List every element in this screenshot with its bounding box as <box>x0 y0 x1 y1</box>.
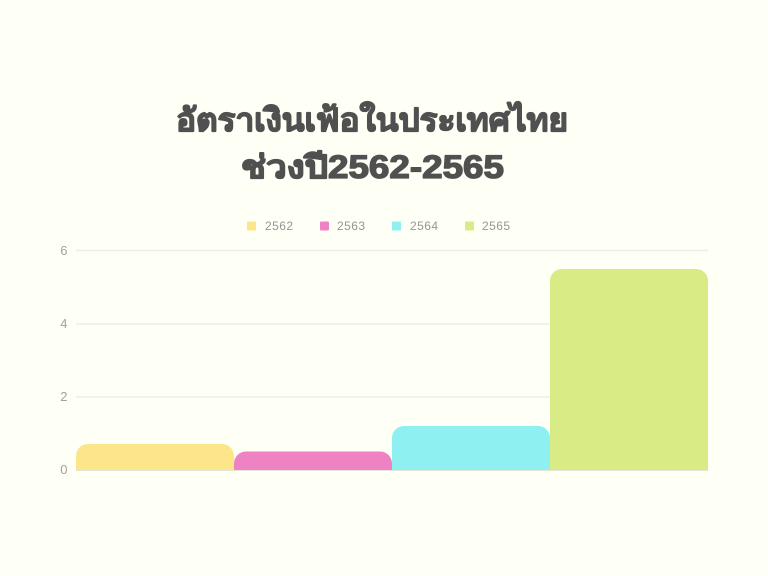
bar: 2565 <box>550 269 708 470</box>
title <box>176 101 568 185</box>
y axis labels: 0 <box>60 462 68 477</box>
legend: 2562 <box>265 219 293 233</box>
bar: 2564 <box>392 426 550 470</box>
legend <box>247 219 510 233</box>
y axis labels: 2 <box>60 389 68 404</box>
bar: 2562 <box>76 444 234 470</box>
legend: 2564 <box>410 219 438 233</box>
y axis labels: 4 <box>60 316 68 331</box>
y axis labels: 6 <box>60 243 68 258</box>
title: อัตราเงินเฟ้อในประเทศไทย <box>176 101 568 138</box>
legend: 2563 <box>337 219 365 233</box>
y axis labels <box>60 243 68 477</box>
bar chart <box>60 243 708 477</box>
title: ช่วงปี2562-2565 <box>241 149 504 185</box>
legend: 2565 <box>482 219 510 233</box>
bar: 2563 <box>234 452 392 470</box>
